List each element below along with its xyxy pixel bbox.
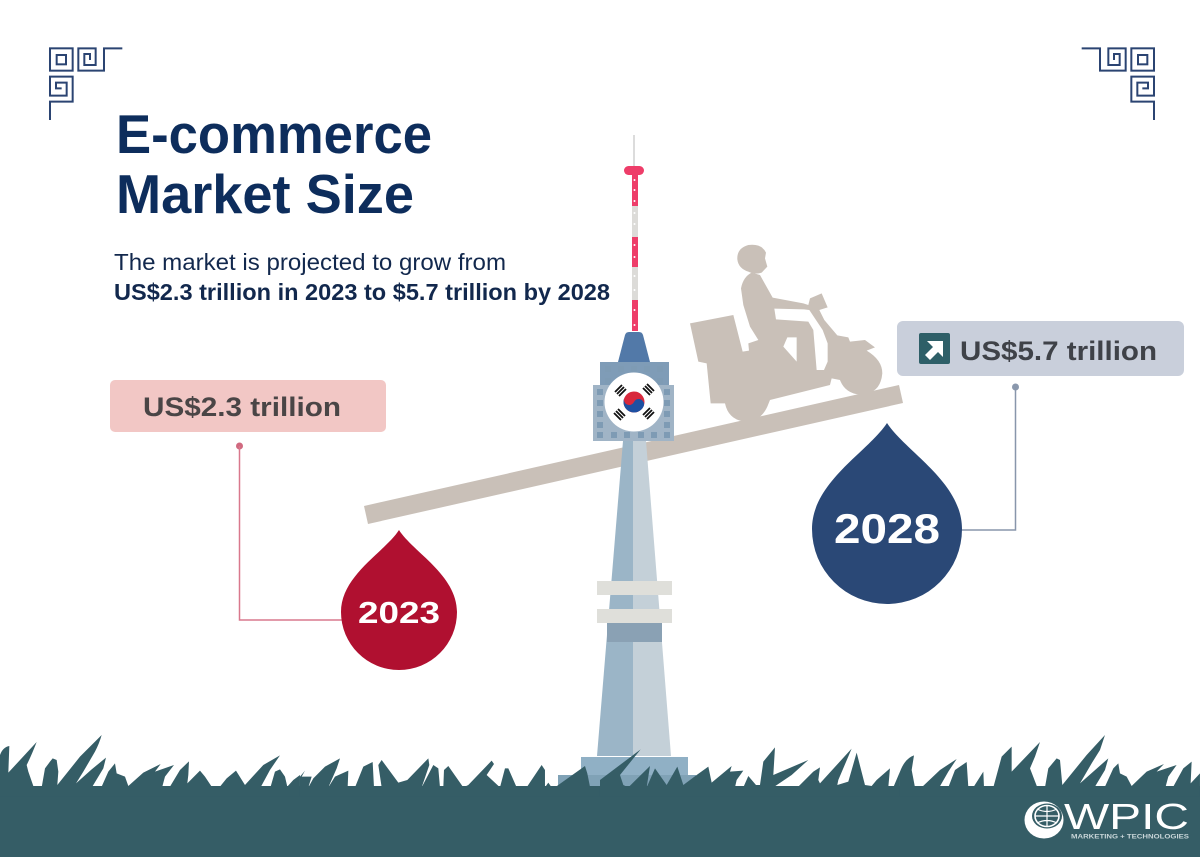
callout: US$5.7 trillion bbox=[897, 321, 1184, 376]
icon: Korean flag bbox=[604, 372, 664, 432]
drop: 2023: 2023 bbox=[358, 595, 440, 630]
logo: WPIC: WPIC bbox=[1064, 796, 1189, 837]
connector: 2023 bbox=[236, 442, 345, 620]
seesaw beam bbox=[364, 385, 903, 524]
logo: WPIC bbox=[1024, 796, 1190, 840]
tower antenna bbox=[624, 135, 644, 331]
corner ornament: top right bbox=[1082, 48, 1154, 120]
drop: 2023 bbox=[341, 530, 457, 670]
grass bbox=[0, 735, 1200, 857]
icon: globe bbox=[1024, 802, 1064, 838]
title: Market Size bbox=[116, 163, 414, 225]
callout: US$5.7 trillion: US$5.7 trillion bbox=[960, 336, 1157, 366]
logo: WPIC: MARKETING + TECHNOLOGIES bbox=[1071, 834, 1190, 840]
subtitle: The market is projected to grow from bbox=[114, 249, 506, 275]
title: E-commerce bbox=[116, 103, 432, 165]
tower shaft bbox=[597, 441, 672, 756]
tower base bbox=[558, 757, 696, 789]
callout: US$2.3 trillion bbox=[110, 380, 386, 432]
tower observation deck bbox=[593, 332, 674, 441]
callout: US$2.3 trillion: US$2.3 trillion bbox=[143, 392, 341, 422]
tower bbox=[558, 135, 696, 789]
drop: 2028 bbox=[812, 423, 962, 604]
connector: 2028 bbox=[960, 384, 1019, 530]
drop: 2028: 2028 bbox=[834, 505, 940, 552]
corner ornament: top left bbox=[50, 48, 122, 120]
title bbox=[116, 103, 432, 225]
icon: delivery scooter rider bbox=[690, 245, 882, 421]
icon: up-right arrow bbox=[919, 333, 950, 364]
subtitle bbox=[114, 249, 610, 305]
subtitle: US$2.3 trillion in 2023 to $5.7 trillion by 2028 bbox=[114, 279, 610, 305]
